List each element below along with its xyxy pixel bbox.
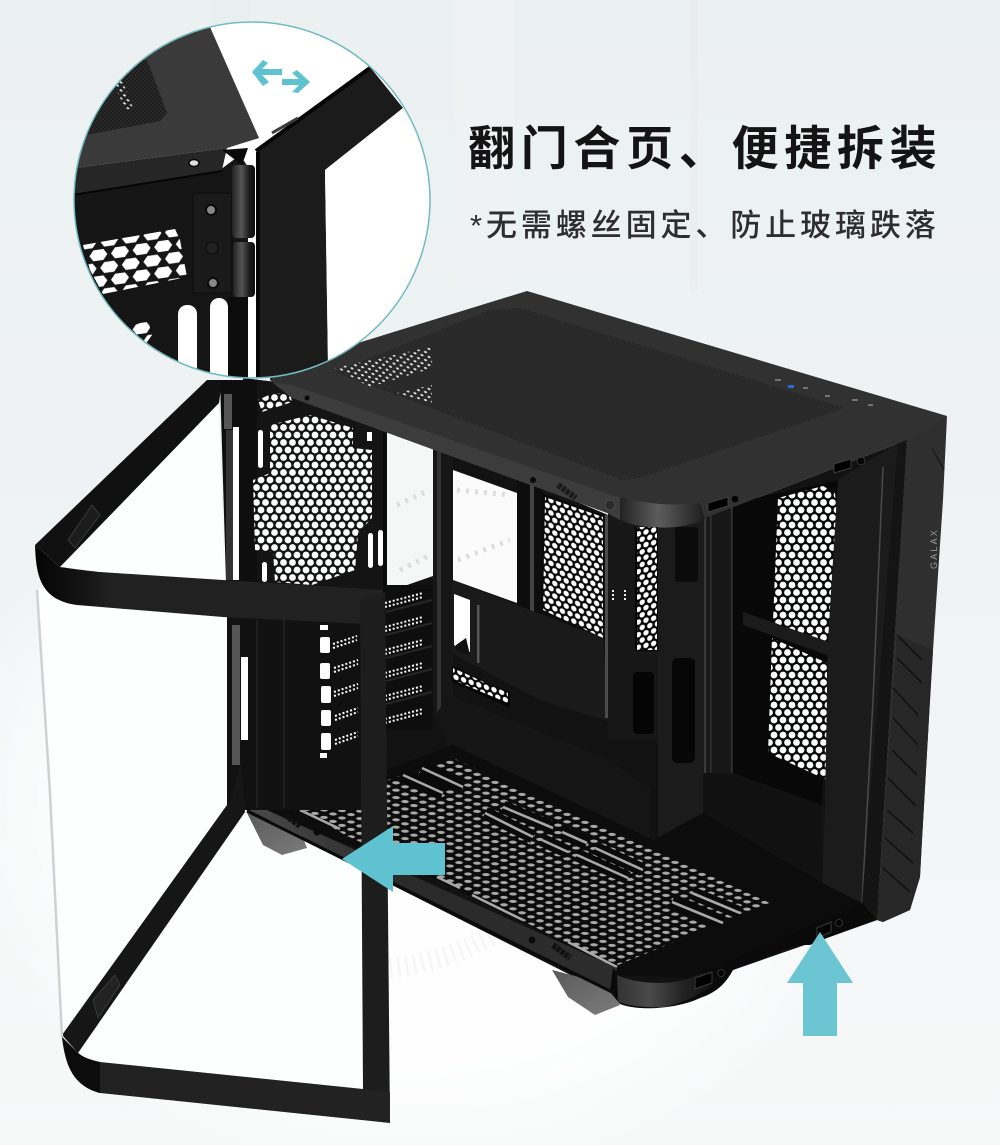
brand text: GALAX xyxy=(929,528,939,569)
PSU shroud plate xyxy=(452,515,610,722)
mesh highlights xyxy=(116,81,132,110)
mesh: back wall rear xyxy=(542,493,604,640)
lower perforated strip xyxy=(452,666,510,708)
door right vertical bar xyxy=(360,592,390,1123)
top panel xyxy=(270,291,947,528)
case interior body xyxy=(243,378,907,1000)
divider bar xyxy=(743,612,832,657)
callout circle: hinge detail xyxy=(60,20,440,390)
foot left xyxy=(247,813,307,855)
door horizontal band with curved corner xyxy=(35,545,385,625)
right window black back xyxy=(733,480,840,805)
case top corner xyxy=(78,28,259,168)
mesh: right wall upper xyxy=(773,486,838,645)
hinge post upper xyxy=(220,380,257,582)
lower shroud plates xyxy=(435,695,650,840)
case front body xyxy=(74,159,248,372)
top mesh xyxy=(335,308,845,480)
hinge screws xyxy=(206,205,218,288)
glass edge xyxy=(37,590,62,1037)
column centre xyxy=(608,500,658,740)
right inner wall xyxy=(822,443,898,903)
hex holes xyxy=(83,229,187,294)
door clip upper xyxy=(68,505,100,548)
door diagonal lower strip xyxy=(62,760,245,1053)
side ribs xyxy=(883,635,922,892)
lower back panel xyxy=(703,773,822,885)
arrow: left pointing xyxy=(342,826,445,892)
post right of mesh xyxy=(383,430,387,595)
column with bracket xyxy=(708,505,744,805)
white slots xyxy=(178,298,228,376)
foot right xyxy=(552,970,620,1015)
bottom port xyxy=(695,972,712,989)
top mesh corner xyxy=(88,60,167,135)
bottom front rail xyxy=(247,806,617,992)
opened glass door: glass pane xyxy=(38,403,363,1089)
side panel xyxy=(862,416,947,922)
mesh: small top xyxy=(258,393,292,412)
rear window left xyxy=(387,430,433,592)
I/O dot rows xyxy=(333,636,358,744)
bottom port right xyxy=(817,922,831,938)
column front xyxy=(658,500,708,840)
logo plate marks xyxy=(285,815,570,958)
mesh: back wall honeycomb xyxy=(253,415,372,585)
door bottom strip with curved corner xyxy=(62,1037,390,1123)
door glass in callout xyxy=(325,108,403,360)
title: 翻门合页、便捷拆装 xyxy=(468,122,942,175)
mesh: right wall lower xyxy=(768,638,827,780)
floor mesh xyxy=(300,758,770,967)
top port xyxy=(708,497,728,512)
light dots on mesh xyxy=(335,347,433,387)
double arrow xyxy=(252,60,310,93)
rear wall posts xyxy=(433,445,542,715)
subtitle: *无需螺丝固定、防止玻璃跌落 xyxy=(470,208,940,243)
front lip xyxy=(74,148,227,194)
floor xyxy=(250,745,862,978)
door upper strip xyxy=(35,380,222,567)
blurred marks behind windows xyxy=(397,490,510,570)
bottom curved lip and plate xyxy=(610,903,877,1008)
door frame in callout xyxy=(255,67,403,385)
top port right xyxy=(834,459,851,473)
door clip lower xyxy=(93,975,120,1018)
slit and rod xyxy=(228,297,248,377)
door lower corner shading xyxy=(62,1037,100,1093)
door inner section: back panel under band xyxy=(227,615,362,810)
wall inner seam xyxy=(862,467,883,903)
curved top lip xyxy=(620,497,705,528)
control buttons xyxy=(775,380,873,405)
case back wall behind door xyxy=(220,378,387,810)
arrow: up pointing xyxy=(787,932,853,1036)
PCI slot covers xyxy=(385,585,433,730)
rear window centre xyxy=(453,470,517,603)
door frame xyxy=(35,380,390,1123)
floor slots xyxy=(300,768,740,967)
I/O white tabs xyxy=(320,625,331,758)
white slots xyxy=(258,430,383,582)
screw hole xyxy=(189,160,199,166)
lower hex holes xyxy=(132,322,152,342)
hinge plate xyxy=(193,193,232,293)
hinge barrel xyxy=(232,165,255,297)
front band xyxy=(273,383,620,520)
feet xyxy=(247,813,620,1015)
